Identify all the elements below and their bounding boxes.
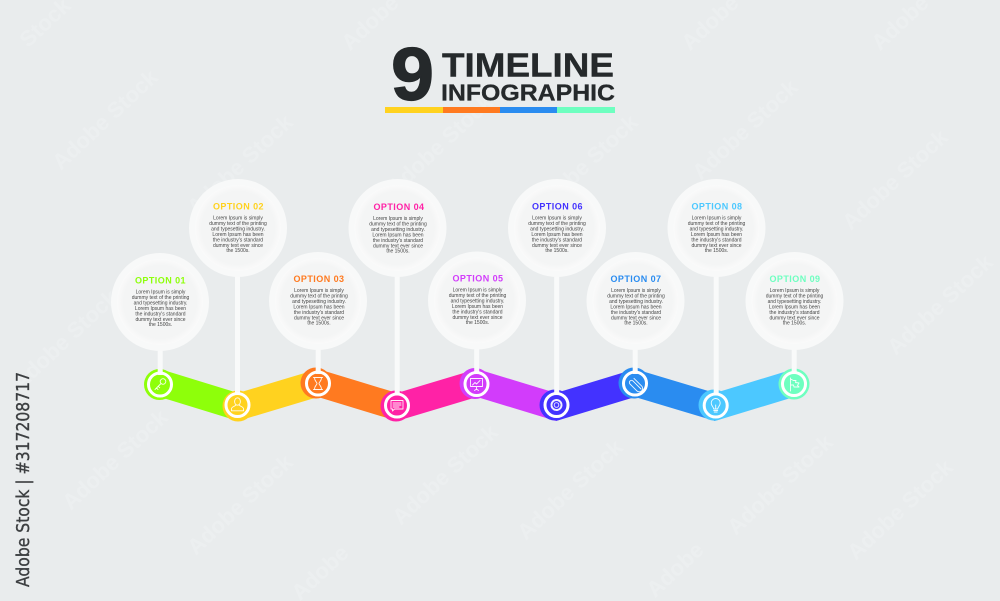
body text: the 1500s.: [226, 248, 250, 254]
body text: dummy text ever since: [691, 243, 742, 249]
panel: option 06: [508, 179, 606, 416]
body text: Lorem Ipsum has been: [769, 304, 820, 310]
body text: the industry's standard: [532, 237, 582, 243]
body text: Lorem Ipsum is simply: [692, 216, 742, 222]
node ring and key icon: [148, 373, 172, 396]
body text: Lorem Ipsum is simply: [532, 216, 582, 222]
body text: dummy text ever since: [135, 317, 186, 323]
panel: option 01: [111, 253, 209, 396]
watermark pattern: Adobe: [641, 537, 708, 601]
body text: Lorem Ipsum is simply: [136, 290, 186, 296]
heading: OPTION 09: [769, 274, 821, 284]
title numeral: 9: [391, 32, 434, 116]
heading: OPTION 03: [293, 274, 345, 284]
heading: OPTION 07: [610, 274, 662, 284]
watermark pattern: Adobe Stock: [182, 449, 298, 560]
watermark pattern: Adobe Stock: [722, 429, 838, 540]
watermark pattern: Adobe Stock: [882, 249, 998, 360]
heading: OPTION 01: [135, 276, 186, 286]
heading: OPTION 06: [532, 202, 583, 212]
body text: dummy text of the printing: [449, 293, 506, 299]
panel: option 09: [746, 252, 844, 396]
body text: dummy text ever since: [452, 315, 503, 321]
body text: and typesetting industry.: [211, 226, 265, 232]
watermark pattern: Adobe Stock: [382, 89, 498, 200]
title line 1: TIMELINE: [442, 48, 614, 84]
body text: Lorem Ipsum is simply: [294, 288, 344, 294]
body text: the 1500s.: [705, 248, 728, 254]
body text: Lorem Ipsum has been: [531, 232, 583, 238]
body text: dummy text of the printing: [132, 295, 189, 301]
node ring and paperclip icon: [624, 372, 646, 395]
body text: the industry's standard: [373, 238, 423, 244]
watermark pattern: Adobe Stock: [842, 454, 958, 565]
heading: OPTION 02: [213, 202, 264, 212]
body text: dummy text ever since: [373, 243, 423, 249]
heading: OPTION 04: [373, 202, 425, 212]
body text: Lorem Ipsum has been: [212, 232, 264, 238]
body text: and typesetting industry.: [451, 298, 504, 304]
body text: and typesetting industry.: [690, 226, 743, 232]
body text: the 1500s.: [386, 249, 410, 255]
body text: and typesetting industry.: [371, 227, 425, 233]
node ring and light bulb icon: [704, 394, 727, 417]
body text: the 1500s.: [149, 322, 172, 328]
body text: dummy text ever since: [769, 315, 820, 321]
panel: option 07: [586, 252, 684, 395]
node ring and presentation icon: [465, 372, 488, 396]
body text: the industry's standard: [294, 310, 344, 316]
body text: dummy text ever since: [532, 243, 582, 249]
body text: Lorem Ipsum is simply: [373, 216, 423, 222]
node ring and speech bubble icon: [386, 394, 408, 417]
body text: dummy text of the printing: [688, 221, 745, 227]
body text: Lorem Ipsum is simply: [611, 288, 661, 294]
panel: option 04: [348, 179, 446, 417]
title: [385, 32, 615, 116]
body text: the industry's standard: [611, 310, 661, 316]
panel: option 05: [428, 252, 526, 396]
body text: Lorem Ipsum is simply: [770, 288, 820, 294]
watermark pattern: Adobe Stock: [687, 74, 803, 185]
node ring and hourglass icon: [306, 372, 330, 395]
watermark pattern: Adobe Stock: [512, 434, 628, 545]
body text: dummy text of the printing: [369, 222, 427, 228]
body text: Lorem Ipsum has been: [452, 304, 503, 310]
watermark pattern: Adobe Stock: [527, 109, 643, 220]
body text: Lorem Ipsum is simply: [213, 216, 263, 222]
body text: the industry's standard: [213, 237, 263, 243]
watermark pattern: Adobe Stock: [7, 284, 123, 395]
stock id side text: Adobe Stock | #317208717: [13, 372, 34, 587]
body text: the 1500s.: [307, 321, 331, 327]
body text: dummy text ever since: [294, 315, 344, 321]
title colour bar: [385, 107, 615, 113]
title line 2: INFOGRAPHIC: [441, 80, 615, 106]
watermark pattern: Adobe Stock: [387, 419, 503, 530]
body text: the 1500s.: [783, 321, 806, 327]
body text: and typesetting industry.: [609, 299, 663, 305]
node ring and person icon: [226, 394, 249, 416]
body text: Lorem Ipsum has been: [691, 232, 742, 238]
node ring and gear icon: [545, 394, 568, 416]
watermark pattern: Adobe Stock: [47, 64, 163, 175]
body text: the industry's standard: [691, 237, 742, 243]
body text: and typesetting industry.: [768, 299, 821, 305]
body text: the 1500s.: [466, 320, 489, 326]
body text: Lorem Ipsum has been: [293, 304, 345, 310]
body text: dummy text of the printing: [607, 294, 665, 300]
body text: dummy text of the printing: [766, 294, 823, 300]
watermark pattern: Adobe Stock: [57, 404, 173, 515]
body text: dummy text of the printing: [290, 294, 348, 300]
panel: option 03: [269, 252, 367, 395]
body text: Lorem Ipsum has been: [372, 232, 424, 238]
heading: OPTION 08: [691, 202, 743, 212]
body text: the 1500s.: [545, 248, 569, 254]
body text: and typesetting industry.: [530, 226, 584, 232]
body text: dummy text of the printing: [209, 221, 267, 227]
body text: the industry's standard: [135, 311, 186, 317]
body text: the industry's standard: [769, 310, 820, 316]
node ring and flag icon: [782, 372, 806, 396]
heading: OPTION 05: [452, 274, 504, 284]
body text: the industry's standard: [452, 309, 503, 315]
body text: dummy text ever since: [611, 315, 661, 321]
body text: the 1500s.: [624, 321, 648, 327]
body text: and typesetting industry.: [134, 300, 187, 306]
body text: dummy text of the printing: [528, 221, 586, 227]
zigzag timeline band: [144, 368, 810, 422]
panel: option 08: [668, 179, 766, 417]
body text: and typesetting industry.: [292, 299, 346, 305]
body text: Lorem Ipsum has been: [610, 304, 662, 310]
body text: Lorem Ipsum is simply: [453, 288, 503, 294]
watermark pattern: Adobe Stock: [182, 109, 298, 220]
panel: option 02: [189, 179, 287, 416]
body text: dummy text ever since: [213, 243, 263, 249]
watermark pattern: Adobe Stock: [837, 124, 953, 235]
body text: Lorem Ipsum has been: [135, 306, 186, 312]
